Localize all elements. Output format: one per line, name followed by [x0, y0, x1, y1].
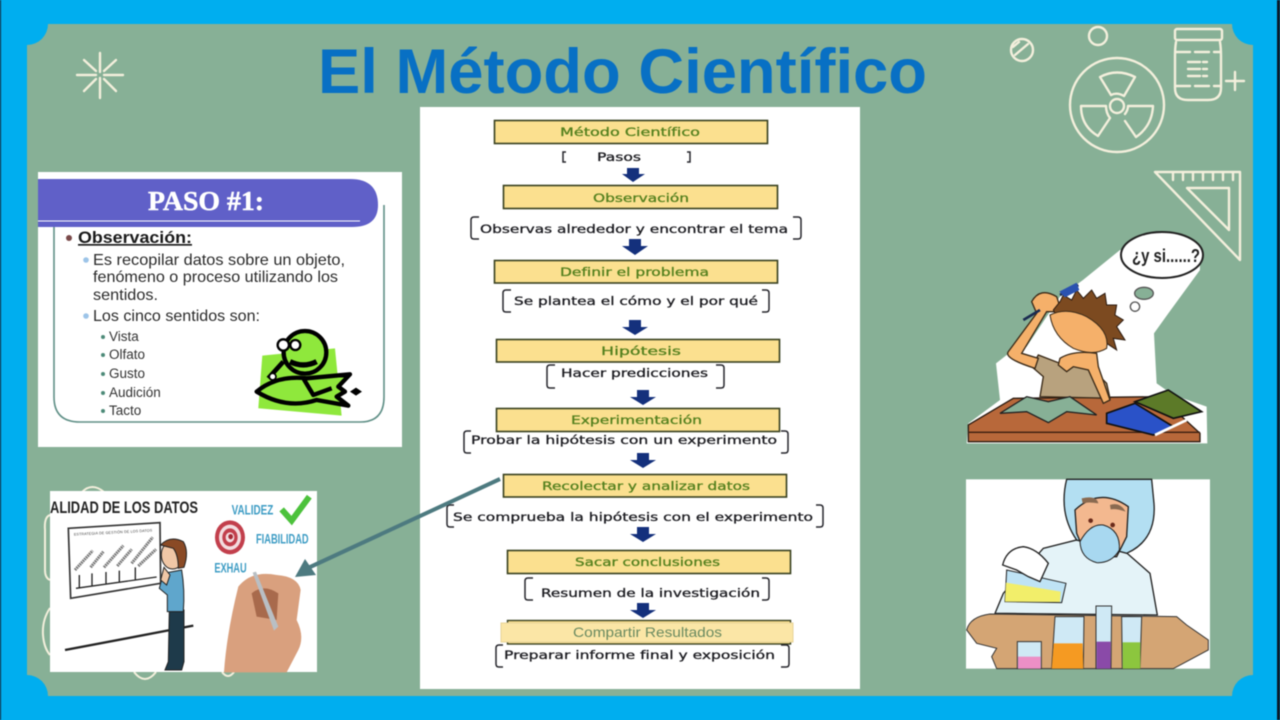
beaker [1005, 570, 1066, 603]
blue book [1107, 403, 1173, 435]
test tube: orange [1052, 617, 1084, 669]
icon: check mark [282, 497, 309, 521]
test tube: pink [1017, 642, 1041, 669]
arrow 7 [630, 603, 656, 618]
step: recolectar [504, 474, 786, 497]
step: método científico: Método Científico [560, 125, 700, 139]
note: observas [471, 217, 801, 239]
slide heading: PASO #1: [148, 186, 264, 216]
slide body text: Es recopilar datos sobre un objeto, [93, 252, 345, 269]
desk [968, 397, 1200, 442]
small thought bubbles [1135, 287, 1153, 299]
raised arm [1008, 293, 1062, 368]
note: hacer predicciones [547, 365, 724, 388]
slide subheading: Observación: [78, 229, 192, 247]
green book [1135, 390, 1202, 418]
table [967, 614, 1208, 669]
test tube: purple [1096, 606, 1112, 669]
title: El Método Científico [318, 37, 927, 107]
step: sacar conclusiones [508, 550, 790, 574]
hand with pen [224, 572, 301, 672]
drawing heading: ALIDAD DE LOS DATOS [50, 498, 198, 517]
open book [1000, 397, 1097, 423]
note: pasos: Pasos [597, 150, 641, 164]
test tube: green [1122, 617, 1142, 669]
person [159, 539, 186, 670]
arrow: datos to drawing [295, 479, 500, 577]
slide body text: fenómeno o proceso utilizando los [93, 269, 338, 286]
arrow 6 [630, 527, 656, 542]
thought bubble [1121, 232, 1203, 278]
step: definir el problema [494, 260, 778, 283]
decorative outlines behind drawing [43, 487, 234, 679]
step: observación [504, 186, 778, 208]
face [1075, 497, 1128, 557]
whiteboard chart: ESTRATEGIA DE GESTIÓN DE LOS DATOS [74, 528, 153, 537]
white cut-out [967, 250, 1207, 443]
whiteboard chart [68, 523, 161, 598]
slide list of senses: Gusto [109, 366, 145, 381]
slide list of senses: Tacto [109, 403, 141, 418]
arrow 5 [630, 453, 656, 468]
step: compartir resultados [501, 620, 793, 644]
note: se comprueba: Se comprueba la hipótesis con el experimento [453, 510, 813, 524]
icon: asterisk spark [77, 53, 123, 98]
thought bubble: ¿y si......? [1132, 246, 1200, 266]
floor line [65, 626, 193, 650]
note: probar [464, 431, 788, 453]
icon: small circle [1089, 27, 1107, 45]
arrow 3 [622, 320, 648, 335]
note: probar: Probar la hipótesis con un experimento [471, 433, 777, 447]
panel: paso 1 slide [38, 172, 402, 447]
labels [214, 501, 309, 575]
cap [1064, 479, 1154, 553]
hair [1053, 290, 1125, 350]
icon: pill [1011, 39, 1033, 61]
step: método científico [494, 120, 768, 144]
illustration: thinking student [967, 232, 1207, 443]
panel: flowchart [420, 107, 860, 689]
step: observación: Observación [593, 191, 689, 205]
note: se comprueba [447, 505, 823, 527]
slide banner [38, 179, 378, 227]
slide list of senses: Audición [109, 385, 161, 400]
step: hipótesis [496, 340, 780, 362]
labels: VALIDEZ [232, 501, 274, 517]
note: resumen [525, 578, 769, 600]
icon: jar [1175, 29, 1244, 100]
arrow 1 [622, 168, 645, 182]
note: resumen: Resumen de la investigación [541, 586, 760, 600]
slide outline [54, 205, 384, 422]
labels: EXHAU [214, 559, 247, 575]
face [1050, 311, 1107, 352]
step: experimentación [496, 408, 780, 432]
arrow 2 [622, 239, 648, 255]
icon: set square [1155, 172, 1240, 260]
icon: target [215, 520, 245, 554]
shirt [1032, 355, 1110, 398]
step: recolectar: Recolectar y analizar datos [542, 479, 750, 493]
note: se plantea [503, 290, 769, 312]
note: se plantea: Se plantea el cómo y el por qué [514, 294, 758, 308]
lab coat [995, 540, 1157, 615]
step: definir el problema: Definir el problema [560, 265, 709, 279]
slide body text: sentidos. [93, 287, 158, 304]
slide list of senses [101, 329, 161, 418]
slide body text: Los cinco sentidos son: [93, 308, 260, 325]
step: sacar conclusiones: Sacar conclusiones [575, 555, 720, 569]
slide list of senses: Olfato [109, 347, 145, 362]
note: preparar: Preparar informe final y exposición [504, 648, 775, 662]
panel: data quality drawing [43, 487, 317, 679]
step: compartir resultados: Compartir Resultados [573, 624, 722, 640]
step: experimentación: Experimentación [571, 413, 702, 427]
note: observas: Observas alrededor y encontrar el tema [480, 222, 788, 236]
labels: FIABILIDAD [256, 530, 309, 546]
pen [1023, 285, 1078, 320]
step: hipótesis: Hipótesis [601, 344, 681, 358]
icon: radiation symbol [1070, 58, 1164, 152]
mask [1080, 525, 1119, 563]
glove [1003, 547, 1048, 582]
chin hand [1058, 352, 1110, 403]
arrow 4 [630, 390, 656, 405]
slide list of senses: Vista [109, 329, 139, 344]
slide body text [83, 252, 345, 325]
icon: green character with magnifier [257, 331, 362, 416]
note: preparar [496, 645, 789, 667]
note: hacer predicciones: Hacer predicciones [561, 366, 708, 380]
note: pasos [563, 150, 690, 164]
illustration: scientist [966, 479, 1210, 669]
